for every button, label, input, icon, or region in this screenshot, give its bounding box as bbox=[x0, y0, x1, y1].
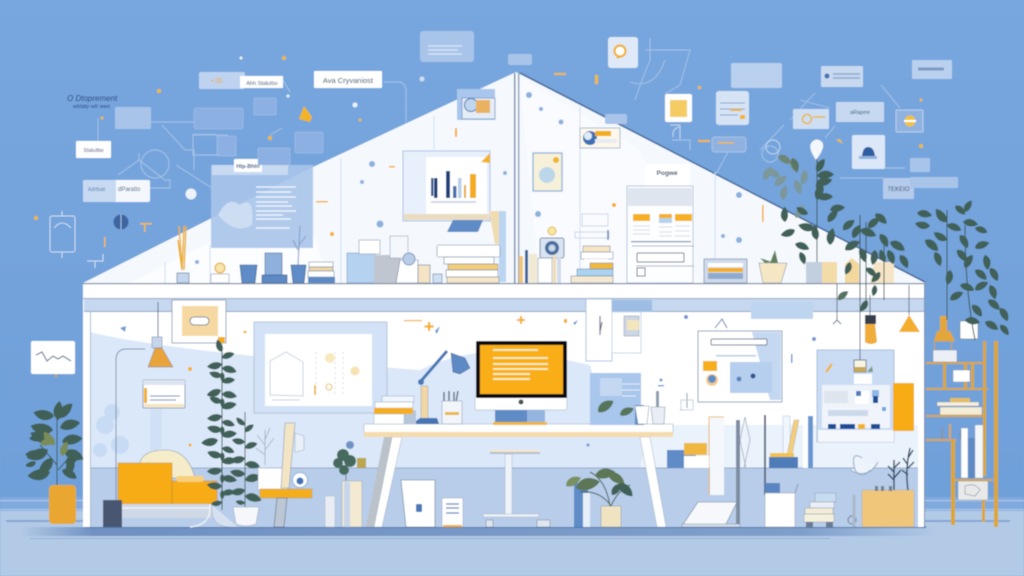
list card bbox=[716, 91, 749, 125]
scattered lower wall specks bbox=[120, 315, 840, 446]
icon: reed vase bbox=[177, 226, 189, 283]
icon: ring outline bbox=[670, 125, 780, 154]
white box and document bbox=[401, 480, 463, 527]
icon: blue cup bbox=[240, 265, 257, 283]
dark floor lamp base bbox=[103, 500, 122, 527]
monitor bbox=[475, 341, 567, 425]
gable tag bbox=[508, 54, 532, 65]
icon: orange ring card bbox=[608, 37, 638, 68]
large hanging plant leaves bbox=[760, 152, 1011, 340]
gable dormer icon bbox=[457, 89, 495, 120]
pendant lamp bbox=[148, 302, 173, 367]
blue icon card bbox=[852, 135, 885, 169]
desk bbox=[364, 424, 673, 527]
orange wall block bbox=[893, 383, 914, 431]
icon: small clock bbox=[211, 263, 229, 283]
desk lamp bbox=[403, 351, 470, 424]
label card bbox=[836, 102, 884, 122]
upright books bbox=[519, 250, 561, 283]
outlined clipboard icon bbox=[50, 211, 103, 268]
attic objects right of divider bbox=[519, 128, 894, 284]
main label: Ava Cryvaniost bbox=[323, 76, 374, 85]
system label: Ahh Stalutbo bbox=[246, 81, 278, 87]
badge card bbox=[580, 128, 620, 148]
operator label: Adrtbatl bbox=[88, 187, 105, 193]
coin card bbox=[793, 109, 829, 129]
lamp on shelf bbox=[933, 316, 957, 362]
icon: blue plant pot bbox=[291, 226, 306, 283]
document sheet with table: Pogwe bbox=[657, 170, 678, 177]
attic desk objects centre bbox=[347, 236, 442, 283]
pale information panel: Htp-Bhtn bbox=[236, 164, 260, 170]
top right card bbox=[912, 60, 952, 79]
hanging note frame bbox=[586, 299, 641, 361]
heading note: O Dtoprement bbox=[67, 94, 118, 103]
text card bbox=[883, 178, 914, 199]
icon: white droplet bbox=[186, 188, 196, 200]
pot bbox=[233, 507, 259, 526]
orange sofa bbox=[118, 450, 217, 527]
teardrop pin bbox=[810, 140, 823, 160]
stalutbo label: Stalutbo bbox=[83, 148, 104, 154]
tray with papers bbox=[704, 259, 747, 283]
book stack bbox=[571, 246, 613, 283]
chair and books bbox=[258, 423, 312, 527]
system label bbox=[240, 76, 283, 88]
stalutbo label bbox=[76, 141, 111, 158]
operator label: dParatlo bbox=[118, 187, 141, 193]
floating labels left bbox=[50, 31, 532, 268]
faint UI boxes bbox=[193, 98, 323, 165]
ladder shelf bbox=[926, 316, 998, 527]
tan planter with dark branches bbox=[848, 448, 914, 527]
wall chart sign bbox=[31, 341, 75, 377]
floating labels right bbox=[605, 37, 958, 199]
framed picture bbox=[533, 153, 562, 191]
shelf binders bbox=[961, 425, 983, 478]
pot bbox=[49, 485, 76, 524]
pale card with stripe bbox=[698, 137, 746, 152]
whiteboard bbox=[254, 322, 387, 413]
stool under desk bbox=[483, 450, 550, 527]
small label bbox=[234, 159, 262, 172]
white cups bbox=[635, 391, 665, 424]
operator label bbox=[83, 180, 150, 202]
white bin with blue tools bbox=[765, 483, 798, 527]
shelf items bbox=[937, 370, 982, 439]
hanging lights bbox=[833, 284, 920, 372]
icon: blue book stand bbox=[262, 253, 287, 283]
orange tag: • ilb bbox=[211, 78, 223, 85]
desk plant in tan pot bbox=[564, 467, 636, 527]
thin wall branch bbox=[256, 428, 274, 465]
icon: yellow pin bbox=[299, 106, 312, 122]
heading note bbox=[67, 94, 118, 110]
icon: book pile bbox=[308, 262, 335, 283]
sun card bbox=[896, 110, 923, 132]
pale note box bbox=[115, 107, 151, 129]
attic wall speck decorations bbox=[195, 92, 764, 264]
wall panel with leaf sketch bbox=[590, 373, 665, 425]
stacked desk books bbox=[374, 396, 414, 424]
sketch map poster bbox=[958, 481, 988, 500]
small plant with white pot bbox=[229, 412, 263, 526]
left potted plant bbox=[25, 400, 86, 524]
lower book pile bbox=[804, 493, 836, 527]
ruler posts and sketch figure bbox=[667, 415, 766, 527]
icon: dark globe bbox=[114, 214, 128, 230]
small pale tags bbox=[605, 114, 958, 188]
label card: aRaprre bbox=[850, 110, 870, 116]
text card: TEKEIO bbox=[887, 187, 910, 193]
laptop bbox=[682, 502, 740, 527]
tall plant bbox=[201, 339, 238, 527]
heading note: wtrtaty wtr wws bbox=[73, 104, 111, 110]
hanging white gadget bbox=[960, 321, 978, 339]
top note box bbox=[420, 31, 474, 62]
roof attic wall bbox=[83, 72, 925, 283]
floor bbox=[0, 497, 1024, 576]
attic stack of books by divider bbox=[437, 211, 506, 283]
orange tag bbox=[199, 72, 245, 89]
pen cup bbox=[442, 391, 462, 424]
upright books on lower shelf bbox=[769, 416, 813, 468]
small UI card bbox=[143, 380, 185, 408]
camera gadget bbox=[540, 227, 564, 258]
tan plant pots bbox=[759, 250, 894, 284]
dashboard card bbox=[698, 319, 782, 402]
scattered dots sky bbox=[34, 56, 923, 247]
small wall seedling bbox=[680, 393, 693, 410]
attic desk objects left bbox=[177, 226, 335, 283]
bar chart panel bbox=[403, 151, 490, 221]
icon: yellow square card bbox=[665, 94, 692, 122]
pale information panel bbox=[211, 159, 313, 248]
potted flower by desk bbox=[325, 441, 366, 527]
notes bbox=[575, 214, 609, 240]
ground floor wall bbox=[83, 284, 925, 527]
small wall panel with blue chart bbox=[817, 350, 894, 442]
slab between floors bbox=[83, 283, 925, 299]
framed sticky note bbox=[172, 300, 226, 343]
document sheet with table bbox=[627, 164, 694, 283]
faint wall plant silhouette bbox=[93, 400, 162, 468]
floating diagram connector lines bbox=[98, 38, 905, 190]
blank card bbox=[731, 63, 782, 88]
floor lamp arc bbox=[116, 349, 145, 500]
card with bulb bbox=[821, 66, 863, 87]
main label bbox=[314, 71, 382, 88]
